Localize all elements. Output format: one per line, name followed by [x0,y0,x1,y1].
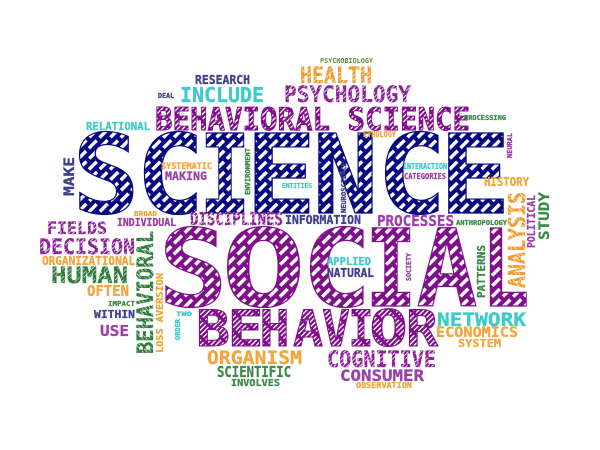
word: FIELDS: FIELDS [47,219,107,239]
word: SYSTEMATIC: SYSTEMATIC [161,162,212,172]
word: PROCESSING: PROCESSING [464,114,506,122]
word: BEHAVIOR: I [348,300,374,358]
word: INDIVIDUAL: INDIVIDUAL [117,216,176,229]
word: ENTITIES: ENTITIES [282,182,312,190]
word: BEHAVIOR: V [322,300,350,358]
word: NEURAL: NEURAL [506,133,514,158]
word: TWO: TWO [176,310,192,318]
word: SCIENCE: S [72,111,140,239]
word: POLITICAL: POLITICAL [525,195,538,248]
word: ORGANIZATIONAL: ORGANIZATIONAL [42,254,135,268]
word: BEHAVIORAL SCIENCE: BEHAVIORAL SCIENCE [155,102,470,138]
word: INVOLVES: INVOLVES [231,378,280,389]
word: SCIENCE: C [377,111,446,239]
word: BEHAVIOR: O [370,300,408,358]
word: SOCIAL: A [416,208,478,332]
word: BEHAVIOR: R [406,300,439,358]
word: ANTHROPOLOGY: ANTHROPOLOGY [456,219,508,227]
word: HUMAN: HUMAN [51,264,128,289]
word: INFORMATION: INFORMATION [285,212,361,227]
word: MAKE: MAKE [62,157,78,196]
word: BEHAVIOR: B [196,300,230,358]
word: BEHAVIORAL vertical: BEHAVIORAL [134,231,159,354]
word: ORGANISM: ORGANISM [207,347,302,369]
word: BEHAVIOR: A [293,300,323,358]
word: NATURAL: NATURAL [327,266,374,280]
word: HISTORY: HISTORY [484,175,530,189]
word: ANALYSIS: ANALYSIS [505,192,531,288]
word: STUDY: STUDY [537,191,553,240]
word: PSYCHOBIOLOGY: PSYCHOBIOLOGY [320,57,374,65]
word: HEALTH: HEALTH [300,64,372,89]
word: DECISION: DECISION [39,235,135,259]
word: BEHAVIOR: H [260,300,290,358]
word: SCIENCE: I [199,111,251,239]
word: USE: USE [100,322,129,340]
word: SOCIAL: L [482,208,530,332]
word: APPLIED: APPLIED [327,255,371,268]
word: BEHAVIOR: E [228,300,264,358]
word: SOCIAL: I [365,208,417,332]
word: COGNITIVE: COGNITIVE [327,348,436,373]
word: PATTERNS: PATTERNS [475,245,488,298]
word: CATEGORIES: CATEGORIES [404,172,446,181]
word: SCIENCE: N [312,111,378,239]
word: SCIENTIFIC: SCIENTIFIC [217,363,291,381]
word: ETHOLOGY: ETHOLOGY [363,130,396,139]
word: SOCIAL: S [158,208,228,332]
word: LOSS AVERSION: LOSS AVERSION [155,273,166,353]
word: ECONOMICS: ECONOMICS [436,325,518,341]
word: RELATIONAL: RELATIONAL [86,120,150,133]
word: CONSUMER: CONSUMER [340,366,424,385]
word: NEUROSCIENCE: NEUROSCIENCE [340,162,348,213]
word: SCIENCE: C [136,111,204,239]
word: INCLUDE: INCLUDE [180,83,264,107]
word: IMPACT: IMPACT [108,300,135,308]
word: SCIENCE: E [439,111,511,239]
word: ORDER: ORDER [174,318,182,340]
word: OBSERVATION: OBSERVATION [356,381,412,390]
word: MAKING: MAKING [165,169,207,183]
word: OFTEN: OFTEN [87,282,129,300]
word: NETWORK: NETWORK [437,309,527,331]
word: SOCIETY: SOCIETY [405,252,413,281]
word: INTERACTION: INTERACTION [403,162,447,171]
word: RESEARCH: RESEARCH [195,73,250,87]
word: SOCIAL: C [302,208,372,332]
word: ENVIRONMENT: ENVIRONMENT [244,148,252,195]
word: SOCIAL: O [222,208,306,332]
word: SYSTEM: SYSTEM [458,337,501,350]
word: DISCIPLINES: DISCIPLINES [190,209,283,230]
word: BROAD: BROAD [134,210,157,218]
word: PROCESSES: PROCESSES [377,212,454,230]
word: SCIENCE: E [246,111,316,239]
word: PSYCHOLOGY: PSYCHOLOGY [284,83,412,108]
word: DEAL: DEAL [158,92,174,100]
word: WITHIN: WITHIN [94,308,135,321]
